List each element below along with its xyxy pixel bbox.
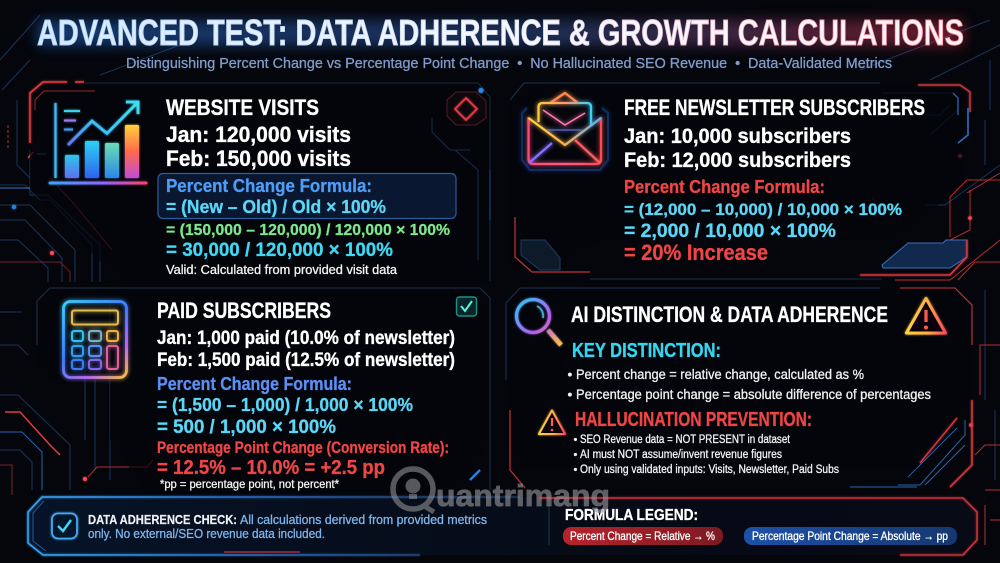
data adherence note body [88,513,487,541]
data adherence note body: All calculations derived from provided metrics [240,513,487,527]
formula legend [563,507,957,545]
calculation steps: = 30,000 / 120,000 × 100% [166,240,393,261]
panel: free newsletter subscribers [510,83,970,279]
icon: hexagon chip [447,88,486,125]
title glow [37,20,964,46]
key distinction: Percent change = relative change, calculated as % [576,367,864,382]
heading: ai distinction: AI DISTINCTION & DATA ADHERENCE [571,302,888,327]
hallucination prevention: AI must NOT assume/invent revenue figures [580,449,782,461]
hallucination prevention: • [574,464,578,476]
formula steps: = 2,000 / 10,000 × 100% [624,221,836,242]
panel: website visits [30,82,490,281]
formula steps: Percent Change Formula: [624,177,825,197]
red plate edge [860,240,967,275]
heading: website visits: WEBSITE VISITS [166,95,319,120]
key distinction: • [568,387,572,402]
visits data: Feb: 150,000 visits [166,146,351,171]
legend pill: percentage point change [744,527,957,545]
icon: check box [52,514,77,538]
formula box: = (New – Old) / Old × 100% [166,197,386,217]
tech plate decoration [882,240,967,268]
icon: rising bar chart [50,102,146,183]
paid data: Jan: 1,000 paid (10.0% of newsletter) [157,327,455,349]
icon: open envelope [522,93,608,170]
formula legend: FORMULA LEGEND: [565,507,698,524]
hallucination prevention [574,409,839,476]
icon: warning triangle [906,298,946,333]
data adherence note body: only. No external/SEO revenue data included. [88,527,325,541]
legend pill: percent change [563,527,723,545]
formula steps [624,177,902,265]
icon: check badge [456,297,476,316]
formula steps: = 500 / 1,000 × 100% [157,417,336,438]
formula steps: = (1,500 – 1,000) / 1,000 × 100% [157,395,413,415]
data adherence note: DATA ADHERENCE CHECK: [88,513,237,527]
calculation steps: Valid: Calculated from provided visit data [166,263,397,277]
icon: small warning triangle [539,410,565,434]
footnote: *pp = percentage point, not percent* [160,479,339,491]
panel: data adherence check bar [28,497,977,555]
subtitle: Distinguishing Percent Change vs Percentage Point Change • No Hallucinated SEO Revenue • Data-Validated Metrics [126,56,892,72]
formula steps: = 12.5% – 10.0% = +2.5 pp [157,457,385,479]
hallucination prevention: SEO Revenue data = NOT PRESENT in dataset [580,434,791,446]
hallucination prevention: HALLUCINATION PREVENTION: [575,409,812,431]
panel: paid subscribers [37,288,490,497]
hallucination prevention: Only using validated inputs: Visits, Newsletter, Paid Subs [580,464,839,476]
formula box [158,174,456,218]
hallucination prevention: • [574,434,578,446]
icon: calculator [64,302,126,378]
panel: ai distinction and data adherence [506,288,972,488]
heading: free newsletter subscribers: FREE NEWSLETTER SUBSCRIBERS [624,95,925,120]
key distinction: KEY DISTINCTION: [572,340,721,362]
paid data: Feb: 1,500 paid (12.5% of newsletter) [157,349,455,371]
formula steps: Percent Change Formula: [157,374,352,394]
subscriber data: Jan: 10,000 subscribers [624,125,851,148]
paid data [157,327,455,371]
formula box: Percent Change Formula: [166,176,372,196]
visits data: Jan: 120,000 visits [166,122,351,147]
heading: paid subscribers: PAID SUBSCRIBERS [157,298,331,323]
legend pill: percent change: Percent Change = Relative → % [570,529,715,543]
watermark: uantrimang [436,478,610,513]
background glow dots [12,154,973,481]
calculation steps: = (150,000 – 120,000) / 120,000 × 100% [166,222,450,239]
formula steps: = (12,000 – 10,000) / 10,000 × 100% [624,200,902,219]
subscriber data [624,125,851,172]
key distinction [568,340,931,402]
hallucination prevention: • [574,449,578,461]
calculation steps [166,222,450,277]
key distinction: Percentage point change = absolute difference of percentages [576,387,931,402]
formula steps [157,374,449,479]
watermark [393,469,610,513]
legend pill: percentage point change: Percentage Point Change = Absolute → pp [752,529,948,543]
formula steps: = 20% Increase [624,240,768,265]
key distinction: • [568,367,572,382]
subscriber data: Feb: 12,000 subscribers [624,149,851,172]
visits data [166,122,351,171]
formula steps: Percentage Point Change (Conversion Rate): [157,439,449,457]
icon: magnifying glass [516,300,561,345]
